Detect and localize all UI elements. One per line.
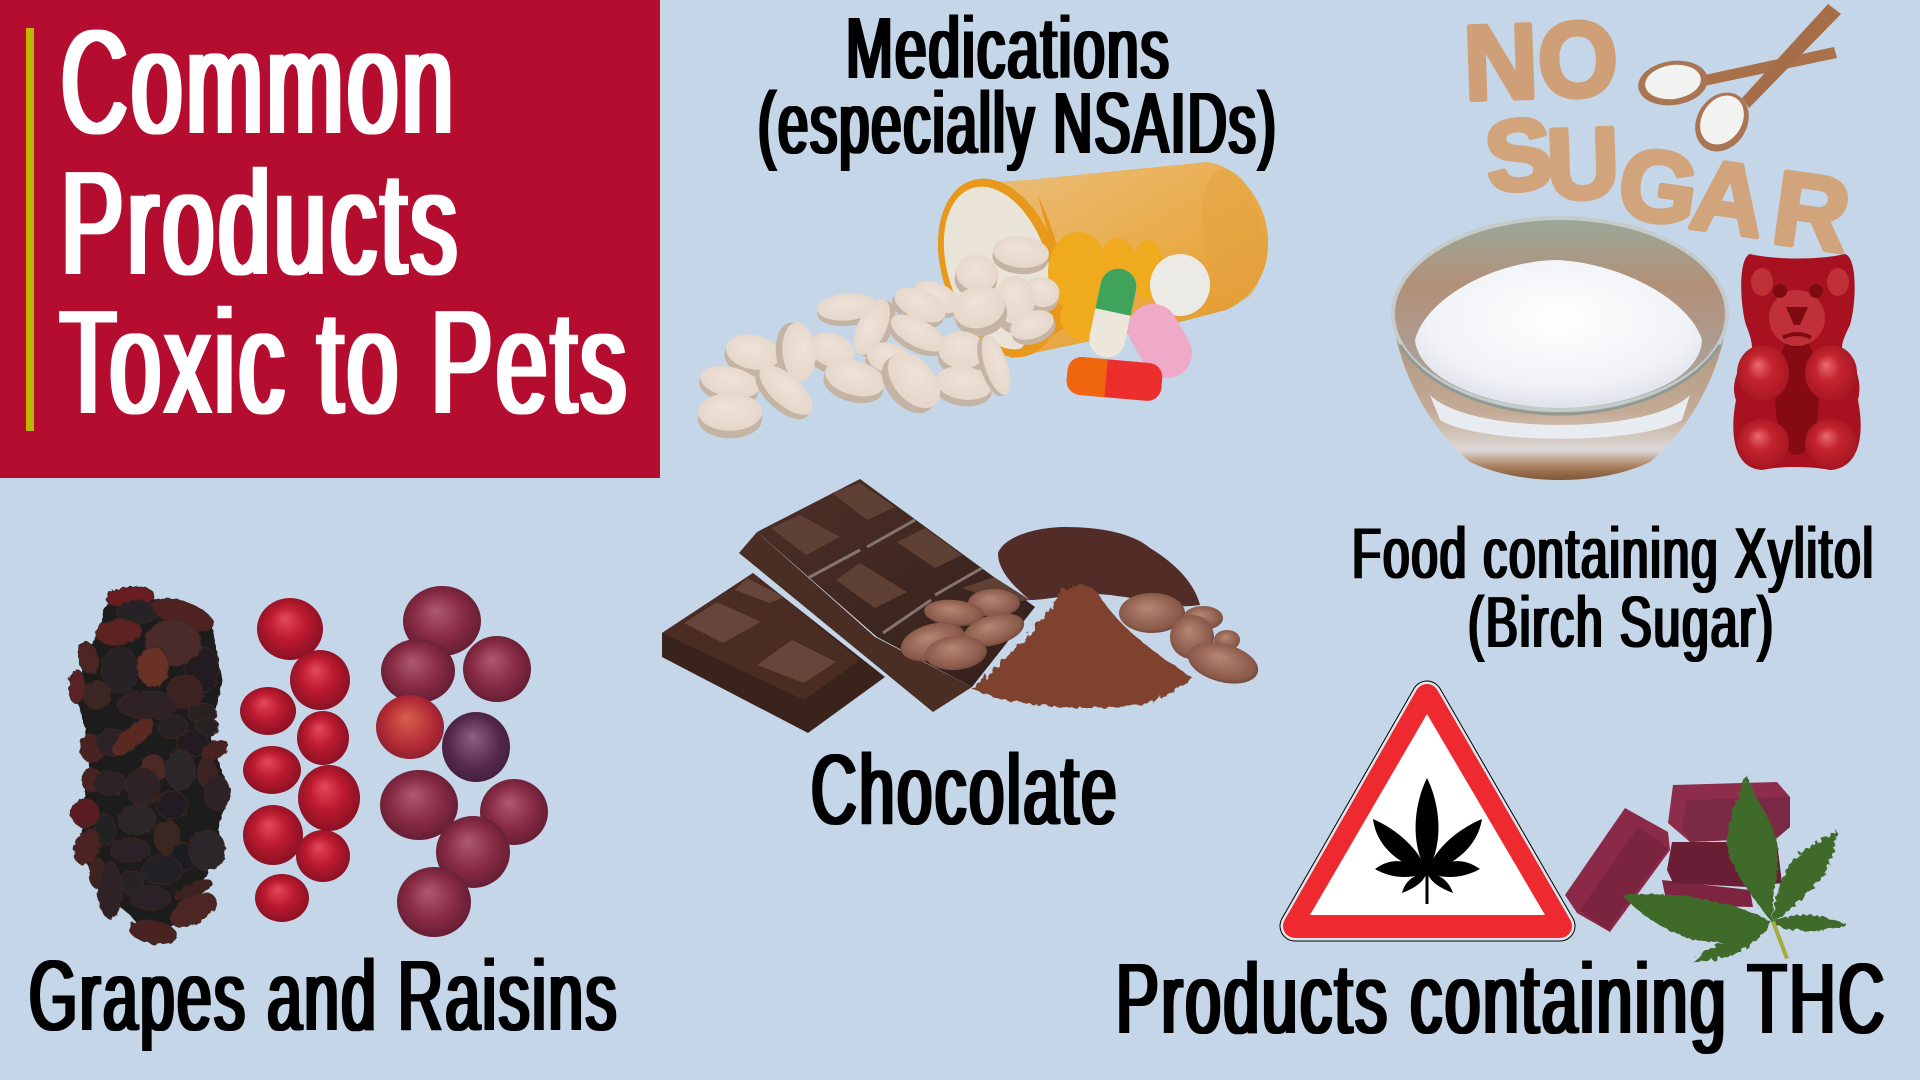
cocoa pod — [998, 527, 1200, 606]
icon: cannabis warning triangle — [1295, 696, 1560, 926]
heading: medications — [758, 0, 1278, 172]
heading: xylitol — [1352, 514, 1875, 663]
icon: cannabis leaf — [1373, 778, 1482, 904]
wooden word: SUGAR: G — [1612, 126, 1705, 248]
illustration: purple grapes — [376, 586, 548, 937]
title: Common — [61, 0, 457, 165]
heading: chocolate: Chocolate — [811, 734, 1119, 846]
illustration: cranberry-red grapes — [240, 598, 360, 922]
illustration: no sugar letters and spoons — [1462, 0, 1857, 275]
cannabis leaf, green — [1622, 775, 1848, 962]
heading: medications: Medications — [846, 0, 1171, 97]
illustration: raisins — [69, 585, 231, 947]
tablets — [696, 234, 1062, 438]
wooden word: SUGAR — [1480, 96, 1857, 275]
edible block, leaning — [1565, 808, 1670, 932]
illustration: spilled pill bottle — [696, 162, 1271, 438]
wooden word: SUGAR: S — [1480, 96, 1558, 215]
wooden word: NO: NO — [1462, 0, 1620, 123]
title: Products — [61, 141, 461, 306]
capsule: orange and red — [1066, 356, 1163, 402]
glass bowl — [1393, 314, 1727, 480]
heading: grapes and raisins: Grapes and Raisins — [29, 940, 619, 1052]
spoon two — [1684, 4, 1841, 162]
capsule: green and white — [1086, 265, 1140, 361]
tablet: white round — [1150, 254, 1210, 316]
edible stack — [1662, 782, 1790, 907]
chocolate bar, lower — [662, 573, 885, 733]
title: Toxic to Pets — [60, 280, 630, 445]
spoon one — [1635, 47, 1837, 110]
title — [60, 0, 630, 445]
chocolate bar, upper — [739, 479, 1035, 712]
wooden word: SUGAR: U — [1545, 107, 1621, 221]
accent bar — [26, 28, 34, 431]
wooden word: SUGAR: A — [1685, 138, 1772, 259]
capsule: pink — [1119, 295, 1201, 387]
heading: xylitol: (Birch Sugar) — [1468, 583, 1775, 663]
illustration: THC edibles — [1565, 775, 1848, 962]
illustration: chocolate and cocoa — [662, 479, 1263, 733]
heading: medications: (especially NSAIDs) — [758, 75, 1278, 172]
illustration: red gummy bear — [1733, 254, 1861, 470]
wooden word: SUGAR: R — [1766, 150, 1857, 275]
cocoa beans — [896, 589, 1263, 691]
illustration: bowl of xylitol — [1393, 218, 1727, 480]
pill bottle — [941, 162, 1268, 358]
panel: title block — [0, 0, 660, 478]
cocoa powder — [970, 585, 1192, 708]
